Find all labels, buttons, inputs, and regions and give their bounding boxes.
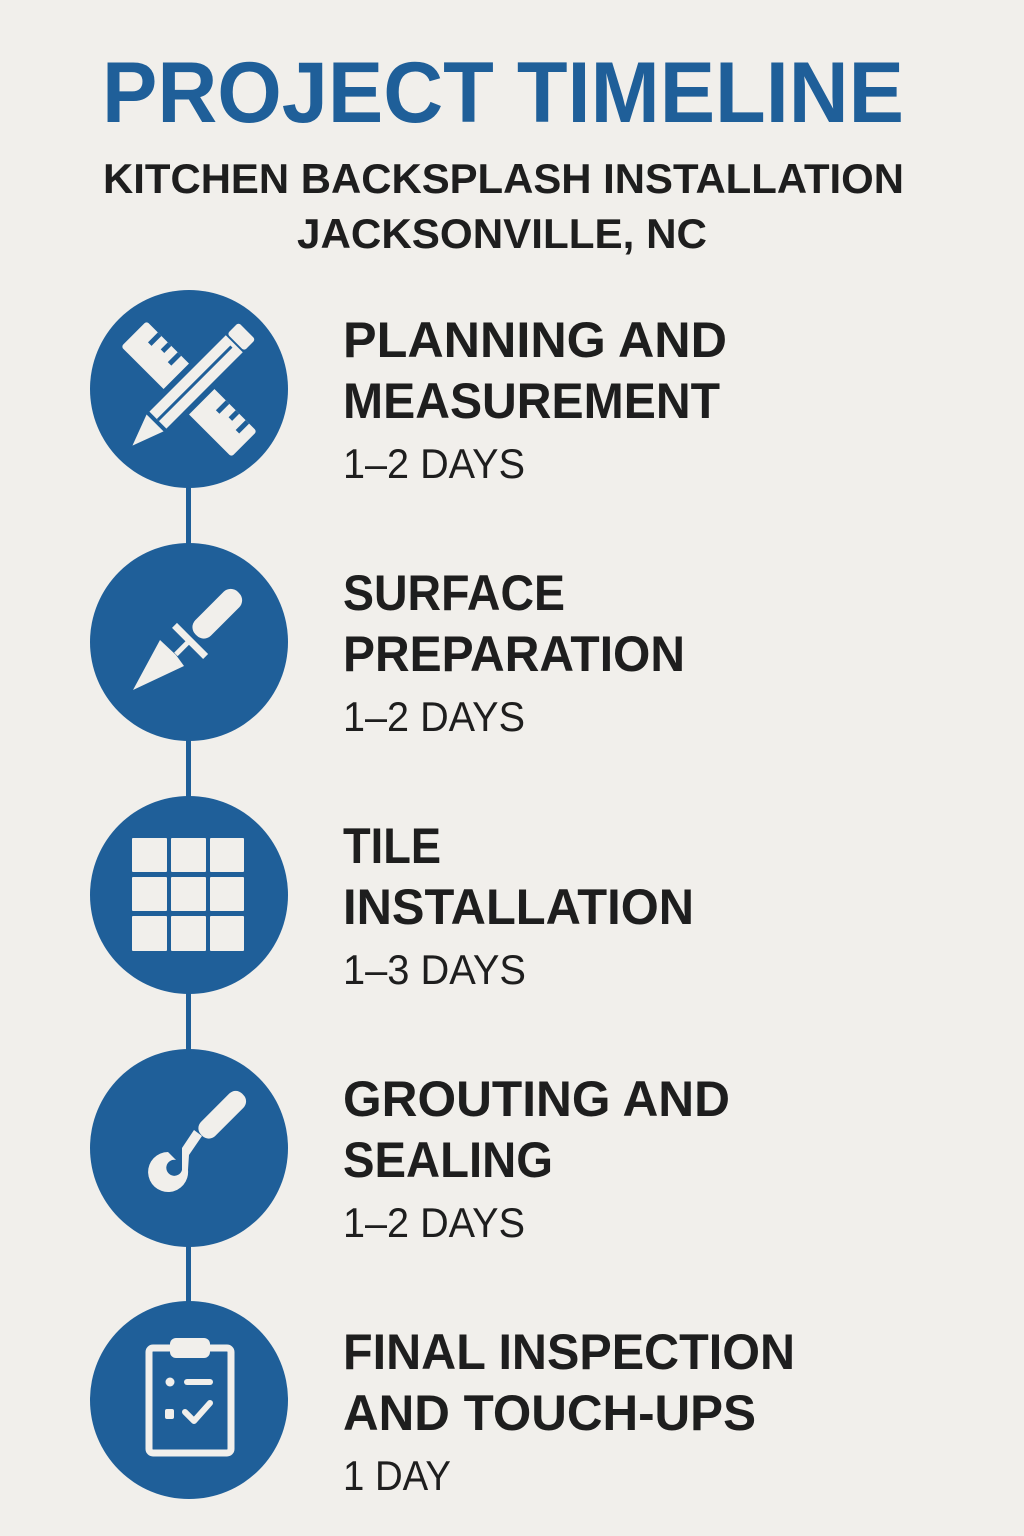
subtitle: KITCHEN BACKSPLASH INSTALLATION [103,155,904,202]
step 1 text: PLANNING AND [343,312,727,368]
step 4 text: 1–2 DAYS [343,1199,525,1246]
timeline connector [186,480,191,1310]
step 3 text: 1–3 DAYS [343,946,526,993]
step 2 text: SURFACE [343,565,565,621]
step 1 text: 1–2 DAYS [343,440,525,487]
step 5 text [343,1324,795,1499]
step 2 text [343,565,685,740]
icon: trowel [90,543,288,741]
step 4: grouting [90,1049,730,1247]
step 1 text [343,312,727,487]
step 3 text: INSTALLATION [343,879,694,935]
step 5: final inspection [90,1301,795,1499]
step 3: tile installation [90,796,694,994]
step 4 text: SEALING [343,1132,553,1188]
icon: tile grid [90,796,288,994]
step 3 text [343,818,694,993]
step 5 text: AND TOUCH-UPS [343,1385,756,1441]
step 4 text [343,1071,730,1246]
step 2 text: 1–2 DAYS [343,693,525,740]
subtitle [103,155,904,257]
step 5 text: 1 DAY [343,1452,451,1499]
title: PROJECT TIMELINE [102,45,904,141]
icon: grout float [90,1049,288,1247]
icon: ruler and pencil [90,290,288,488]
step 2: surface preparation [90,543,685,741]
step 2 text: PREPARATION [343,626,685,682]
step 1: planning [90,290,727,488]
step 3 text: TILE [343,818,441,874]
step 4 text: GROUTING AND [343,1071,730,1127]
icon: clipboard checklist [90,1301,288,1499]
subtitle: JACKSONVILLE, NC [297,210,707,257]
step 1 text: MEASUREMENT [343,373,720,429]
step 5 text: FINAL INSPECTION [343,1324,795,1380]
